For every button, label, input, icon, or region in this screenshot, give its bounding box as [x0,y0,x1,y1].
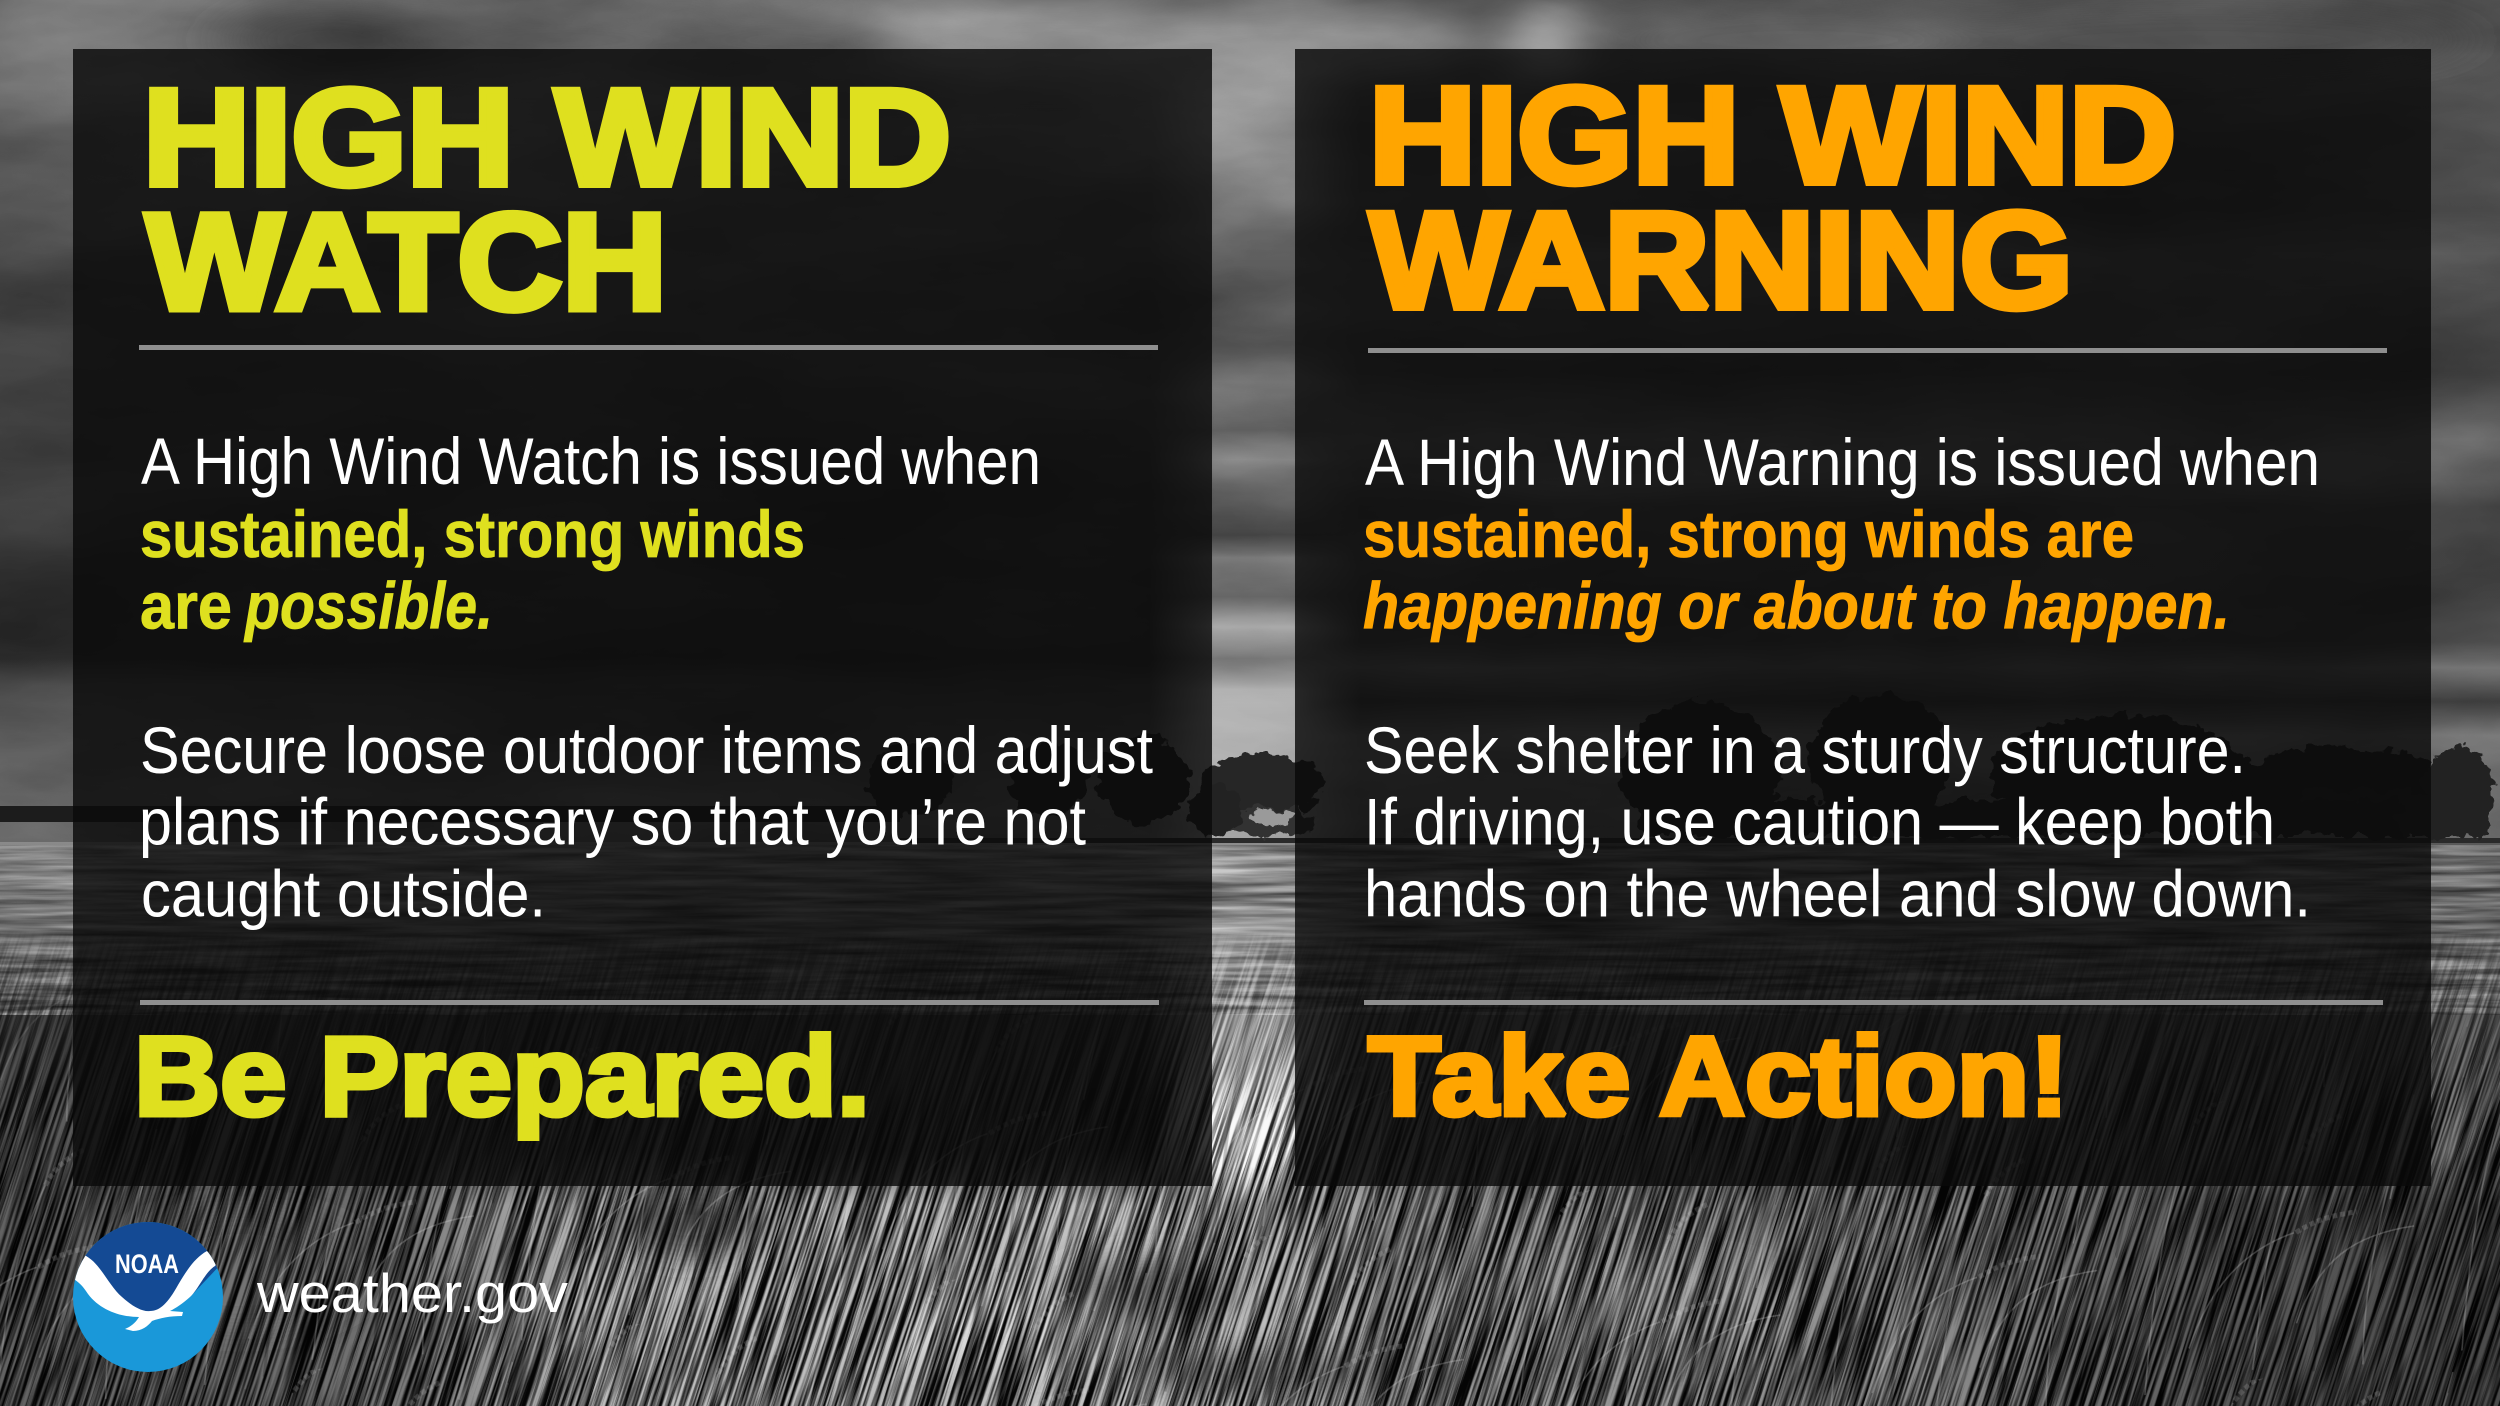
sky [0,0,2500,846]
panel: High Wind Watch [73,49,1212,1186]
call to action: Take Action: Take Action! [1368,1014,2069,1139]
icon: NOAA logo [70,1222,223,1372]
text block: when a watch is issued: sustained, strong winds [140,497,805,571]
text block: when a warning is issued: sustained, strong winds are [1363,497,2134,571]
text block: watch advice: plans if necessary so that you’re not [139,784,1086,858]
title: High Wind Warning: HIGH WIND [1369,60,2176,212]
text block: watch advice: Secure loose outdoor items and adjust [140,713,1153,787]
text block: when a watch is issued: are [140,568,232,642]
title: High Wind Watch: HIGH WIND [143,62,951,214]
icon: NOAA logo: NOAA [115,1249,179,1279]
website label: weather.gov: weather.gov [256,1262,569,1324]
text block: when a warning is issued: happening or about to happen. [1363,568,2230,642]
tree line on the horizon [0,694,2500,843]
text block: warning advice [1364,713,2311,930]
text block: watch advice: caught outside. [141,856,546,930]
panel background [1295,49,2431,1186]
title: High Wind Warning [1369,60,2176,338]
call to action: Be Prepared: Be Prepared. [134,1014,870,1139]
panel: High Wind Warning [1295,49,2431,1186]
text block: when a warning is issued [1363,425,2320,642]
title: High Wind Watch [143,62,951,339]
text block: warning advice: Seek shelter in a sturdy structure. [1364,713,2246,787]
panel background [73,49,1212,1186]
title: High Wind Warning: WARNING [1370,184,2073,338]
text block: when a watch is issued: A High Wind Watch is issued when [141,424,1041,498]
text block: when a watch is issued: possible. [243,568,493,642]
title: High Wind Watch: WATCH [146,186,667,339]
text block: watch advice [139,713,1153,930]
text block: when a warning is issued: A High Wind Warning is issued when [1365,425,2320,499]
text block: when a watch is issued [140,424,1041,642]
wheat field [0,838,2500,1406]
text block: warning advice: hands on the wheel and slow down. [1364,856,2311,930]
text block: warning advice: If driving, use caution — keep both [1364,784,2275,858]
